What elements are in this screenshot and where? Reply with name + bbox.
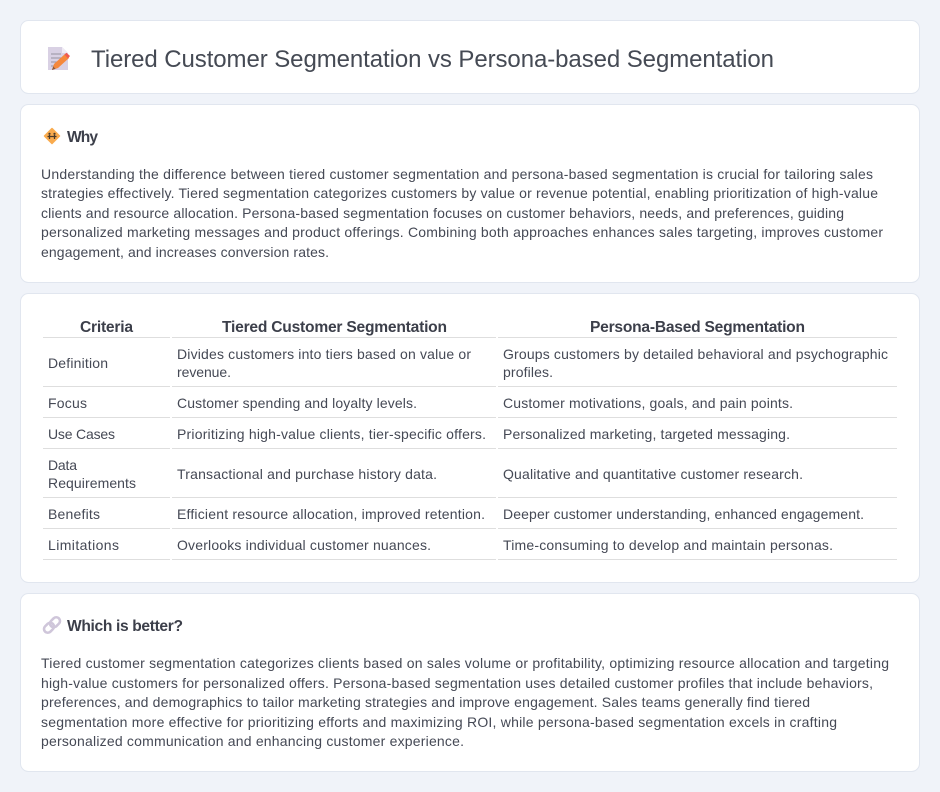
table row: definition: Divides customers into tiers based on value or [177,346,471,362]
text block: which is better paragraph: preferences, and demographics to tailor marketing strategies and improve engagement. Sales teams generally find tiered [41,694,810,710]
table header row: Persona-Based Segmentation [590,319,805,336]
table row: definition: revenue. [177,364,231,380]
table row: benefits: Benefits [48,506,100,522]
icon: chain link [42,616,62,634]
table header row: Tiered Customer Segmentation [222,319,447,336]
table row: definition: Groups customers by detailed behavioral and psychographic [503,346,888,362]
table row: data requirements: Data [48,457,77,473]
text block: why paragraph: Understanding the difference between tiered customer segmentation and persona-based segmentation is crucial for tailoring sales [41,166,873,182]
table row: focus: Focus [48,395,87,411]
table row: benefits: Deeper customer understanding, enhanced engagement. [503,506,864,522]
text block: which is better paragraph [41,655,889,749]
table row: data requirements: Qualitative and quantitative customer research. [503,466,803,482]
text block: which is better paragraph: personalized communication and enhancing customer experience. [41,733,464,749]
table row: limitations: Overlooks individual customer nuances. [177,537,431,553]
table row: definition: profiles. [503,364,553,380]
table row: limitations [43,537,897,560]
table header row: Criteria [80,319,133,336]
heading: why: Why [67,129,98,146]
text block: why paragraph [41,166,883,260]
table row: benefits: Efficient resource allocation, improved retention. [177,506,485,522]
table row: definition: Definition [48,355,108,371]
table row: focus: Customer motivations, goals, and pain points. [503,395,793,411]
panel: comparison table [20,294,920,582]
table row: use cases: Personalized marketing, targeted messaging. [503,426,790,442]
panel: why [20,104,920,282]
table row: data requirements: Transactional and purchase history data. [177,466,437,482]
text block: why paragraph: personalized marketing messages and product offerings. Combining both approaches enhances sales targeting, improves customer [41,224,883,240]
icon: orange diamond sign [44,128,60,144]
table row: use cases: Prioritizing high-value clients, tier-specific offers. [177,426,486,442]
table row: limitations: Limitations [48,537,119,553]
heading: which is better: Which is better? [67,618,183,635]
table row: focus [43,395,897,418]
table row: benefits [43,506,897,528]
table row: data requirements [43,457,897,498]
table row: use cases [43,426,897,448]
text block: which is better paragraph: Tiered customer segmentation categorizes clients based on sales volume or profitability, optimizing resource allocation and targeting [41,655,889,671]
text block: why paragraph: clients and resource allocation. Persona-based segmentation focuses on customer behaviors, needs, and preferences, guiding [41,205,844,221]
table row: limitations: Time-consuming to develop and maintain personas. [503,537,833,553]
panel: which is better [20,594,920,772]
text block: why paragraph: strategies effectively. Tiered segmentation categorizes customers by value or revenue potential, enabling prioritization of high-value [41,185,878,201]
title: Tiered Customer Segmentation vs Persona-based Segmentation [91,46,774,73]
table row: focus: Customer spending and loyalty levels. [177,395,417,411]
panel: title header [20,20,920,94]
table row: use cases: Use Cases [48,426,115,442]
table row: definition [43,346,897,386]
text block: which is better paragraph: high-value customers for personalized offers. Persona-based segmentation uses detailed customer profiles that include behaviors, [41,675,873,691]
text block: which is better paragraph: segmentation more effective for prioritizing efforts and maximizing ROI, while persona-based segmentation excels in crafting [41,714,837,730]
icon: memo with pencil [48,47,70,70]
table header row [43,319,897,338]
text block: why paragraph: engagement, and increases conversion rates. [41,244,329,260]
table row: data requirements: Requirements [48,475,136,491]
